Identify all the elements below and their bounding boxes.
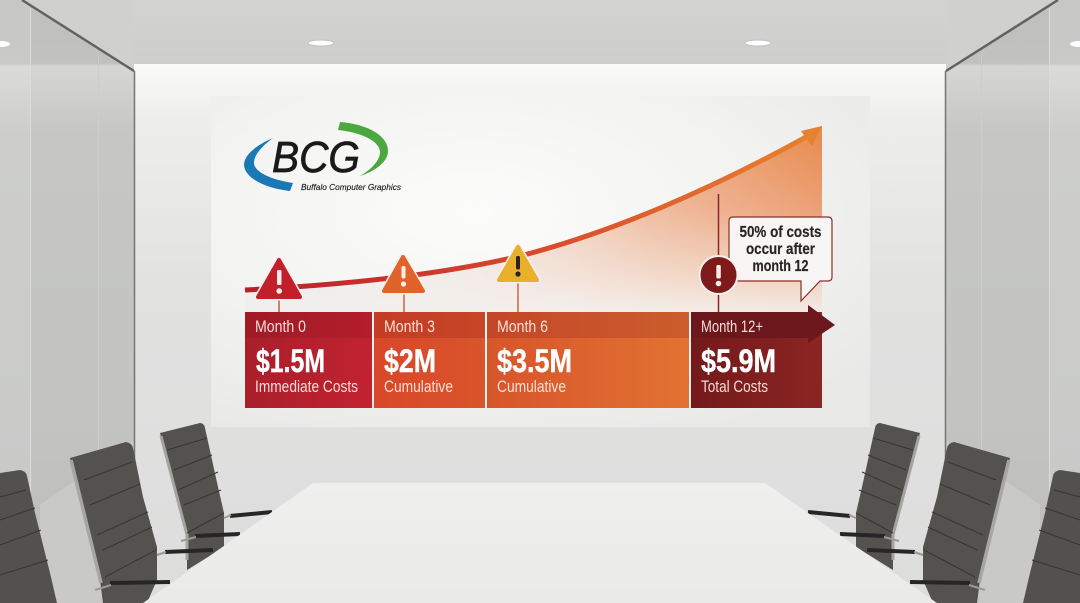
column: month 3 bbox=[374, 312, 485, 408]
callout: 50% of costs: month 12 bbox=[752, 258, 809, 275]
icon: month 12 alert bbox=[700, 194, 738, 312]
logo: BCG: Buffalo Computer Graphics bbox=[301, 182, 402, 192]
column: month 0: Month 0 bbox=[255, 317, 306, 336]
column: month 3: Cumulative bbox=[384, 377, 453, 396]
column: month 0: Immediate Costs bbox=[255, 377, 358, 396]
ceiling lights bbox=[0, 40, 1080, 47]
icon: month 3 warning bbox=[384, 257, 423, 312]
back wall bbox=[134, 64, 946, 603]
left glass partition bbox=[0, 0, 134, 603]
conference table bbox=[143, 483, 937, 603]
column: month 12+: $5.9M bbox=[701, 343, 776, 379]
callout: 50% of costs: occur after bbox=[746, 241, 815, 258]
ceiling bbox=[0, 0, 1080, 65]
chairs right bbox=[808, 423, 1080, 603]
column: month 6: $3.5M bbox=[497, 343, 572, 379]
column: month 12+ bbox=[691, 305, 835, 408]
callout: 50% of costs bbox=[729, 217, 832, 301]
column: month 0: $1.5M bbox=[256, 343, 325, 379]
column: month 6 bbox=[487, 312, 689, 408]
column: month 6: Month 6 bbox=[497, 317, 548, 336]
chairs left bbox=[0, 423, 272, 603]
right glass partition bbox=[946, 0, 1080, 603]
chart: cost area under curve bbox=[245, 126, 822, 312]
column: month 12+: Total Costs bbox=[701, 377, 768, 396]
icon: month 0 warning bbox=[258, 260, 300, 312]
column: month 3: Month 3 bbox=[384, 317, 435, 336]
icon: month 6 warning bbox=[499, 247, 537, 312]
panel: infographic board bbox=[211, 96, 870, 427]
chart: cost curve arrow bbox=[245, 126, 822, 290]
logo: BCG bbox=[244, 122, 402, 192]
column: month 12+: Month 12+ bbox=[701, 317, 763, 336]
logo: BCG: BCG bbox=[272, 133, 360, 182]
column: month 6: Cumulative bbox=[497, 377, 566, 396]
callout: 50% of costs: 50% of costs bbox=[740, 224, 822, 241]
column: month 3: $2M bbox=[384, 343, 436, 379]
column: month 0 bbox=[245, 312, 372, 408]
